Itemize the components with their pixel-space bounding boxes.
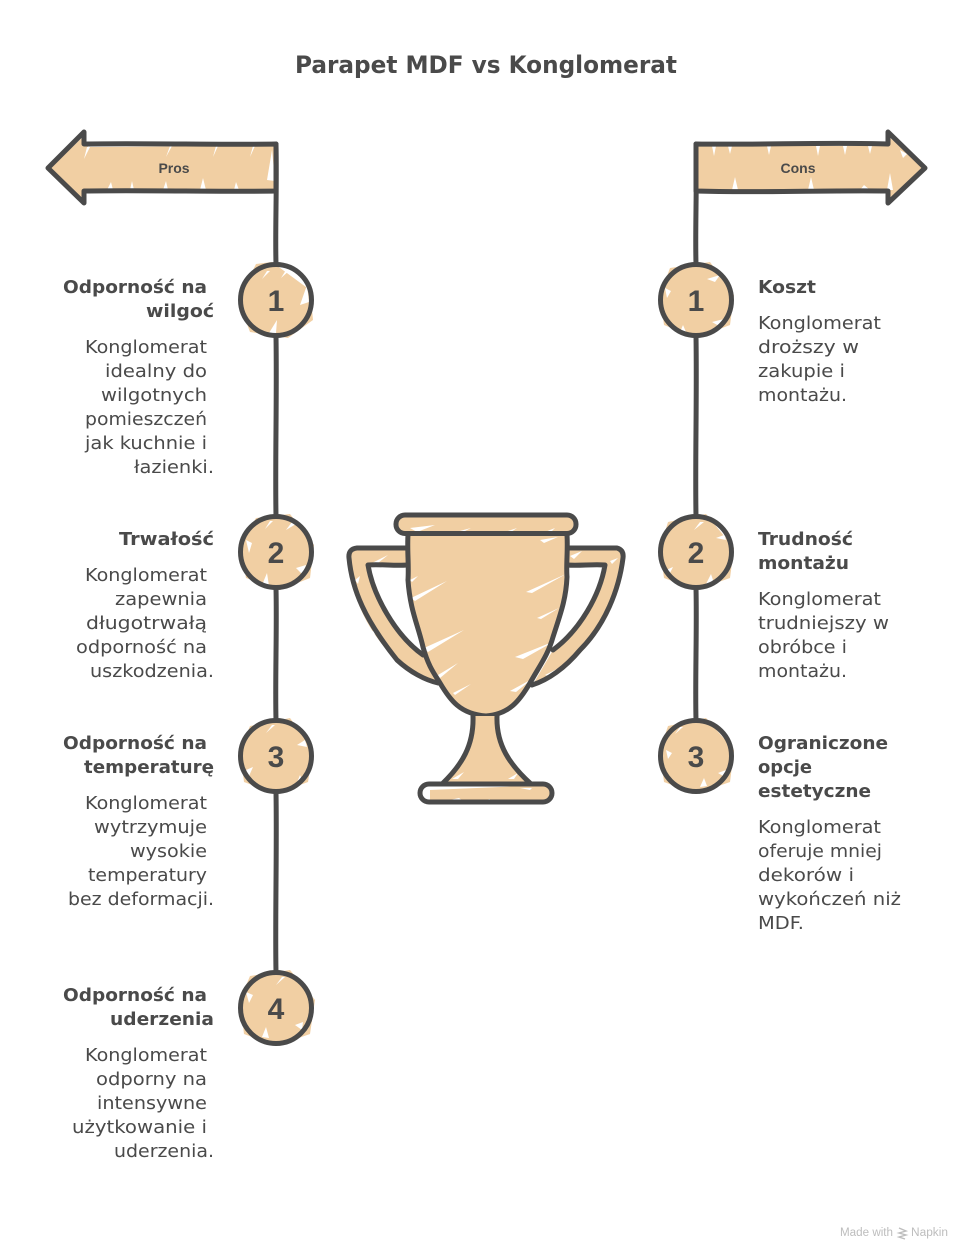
body: droższy w	[758, 338, 859, 358]
text block: pros 2	[76, 530, 214, 682]
body: obróbce i	[758, 638, 847, 658]
body: trudniejszy w	[758, 614, 889, 634]
body: odporność na	[76, 638, 207, 658]
heading: estetyczne	[758, 782, 871, 802]
step circle: pros 4	[240, 970, 315, 1046]
body: uszkodzenia.	[90, 662, 214, 682]
text block: pros 4	[63, 986, 214, 1162]
step circle: cons 1	[660, 262, 734, 338]
heading: Odporność na	[63, 278, 207, 298]
body: Konglomerat	[758, 590, 881, 610]
heading: temperaturę	[84, 758, 214, 778]
footer: made with napkin: Napkin	[911, 1227, 948, 1239]
cup body	[408, 534, 567, 716]
heading: opcje	[758, 758, 812, 778]
body	[758, 818, 901, 934]
heading	[63, 734, 214, 778]
body: montażu.	[758, 662, 847, 682]
step circle: cons 2	[660, 514, 734, 590]
text block: pros 1	[63, 278, 214, 478]
body	[758, 590, 889, 682]
footer: made with napkin: Made with	[840, 1227, 893, 1239]
number 1: 1	[688, 285, 704, 318]
body: uderzenia.	[114, 1142, 214, 1162]
footer: made with napkin	[840, 1227, 948, 1239]
heading: Trwałość	[119, 530, 214, 550]
body: Konglomerat	[85, 1046, 207, 1066]
body: odporny na	[96, 1070, 207, 1090]
label: pros: Pros	[158, 160, 190, 176]
body	[68, 794, 214, 910]
step circle: pros 2	[240, 514, 314, 590]
rim	[396, 515, 576, 534]
icon: napkin logo	[899, 1228, 906, 1239]
body: Konglomerat	[758, 314, 881, 334]
number 3: 3	[688, 741, 704, 774]
heading: uderzenia	[110, 1010, 214, 1030]
right handle	[532, 548, 624, 686]
body: intensywne	[97, 1094, 207, 1114]
step circle: cons 3	[660, 718, 734, 794]
text block: cons 3	[758, 734, 901, 934]
icon: trophy	[348, 515, 624, 802]
number 3: 3	[268, 741, 284, 774]
text block: pros 3	[63, 734, 214, 910]
body: dekorów i	[758, 866, 854, 886]
body: użytkowanie i	[72, 1118, 207, 1138]
base	[420, 784, 552, 802]
body: idealny do	[105, 362, 207, 382]
label: cons: Cons	[780, 160, 816, 176]
body: temperatury	[88, 866, 207, 886]
body: montażu.	[758, 386, 847, 406]
heading	[758, 734, 888, 802]
number 4: 4	[268, 993, 285, 1026]
heading: Trudność	[758, 530, 853, 550]
body: oferuje mniej	[758, 842, 882, 862]
heading	[758, 530, 853, 574]
body: łazienki.	[134, 458, 214, 478]
heading: montażu	[758, 554, 849, 574]
body	[758, 314, 881, 406]
body: długotrwałą	[86, 614, 207, 634]
text block: cons 1	[758, 278, 881, 406]
number 2: 2	[688, 537, 704, 570]
left handle	[348, 548, 438, 685]
heading	[63, 278, 214, 322]
heading: Koszt	[758, 278, 816, 298]
arrow: pros	[48, 132, 276, 203]
body: bez deformacji.	[68, 890, 214, 910]
right timeline line	[693, 144, 699, 720]
body: Konglomerat	[85, 566, 207, 586]
body: pomieszczeń	[85, 410, 207, 430]
number 1: 1	[268, 285, 284, 318]
body	[84, 338, 214, 478]
stem	[442, 716, 531, 784]
body: zapewnia	[115, 590, 207, 610]
title: Parapet MDF vs Konglomerat	[295, 51, 677, 79]
body: zakupie i	[758, 362, 845, 382]
body: wilgotnych	[101, 386, 207, 406]
body: Konglomerat	[758, 818, 881, 838]
body: wykończeń niż	[758, 890, 901, 910]
body: wytrzymuje	[94, 818, 207, 838]
step circle: pros 3	[240, 718, 313, 794]
arrow: cons	[696, 132, 925, 203]
body: jak kuchnie i	[84, 434, 207, 454]
text block: cons 2	[758, 530, 889, 682]
body: Konglomerat	[85, 338, 207, 358]
body	[76, 566, 214, 682]
left timeline line	[273, 144, 279, 972]
step circle: pros 1	[238, 262, 313, 338]
heading: Odporność na	[63, 734, 207, 754]
heading: Odporność na	[63, 986, 207, 1006]
number 2: 2	[268, 537, 284, 570]
body: wysokie	[130, 842, 207, 862]
heading: wilgoć	[146, 302, 214, 322]
body	[72, 1046, 214, 1162]
body: MDF.	[758, 914, 804, 934]
heading	[63, 986, 214, 1030]
body: Konglomerat	[85, 794, 207, 814]
heading: Ograniczone	[758, 734, 888, 754]
